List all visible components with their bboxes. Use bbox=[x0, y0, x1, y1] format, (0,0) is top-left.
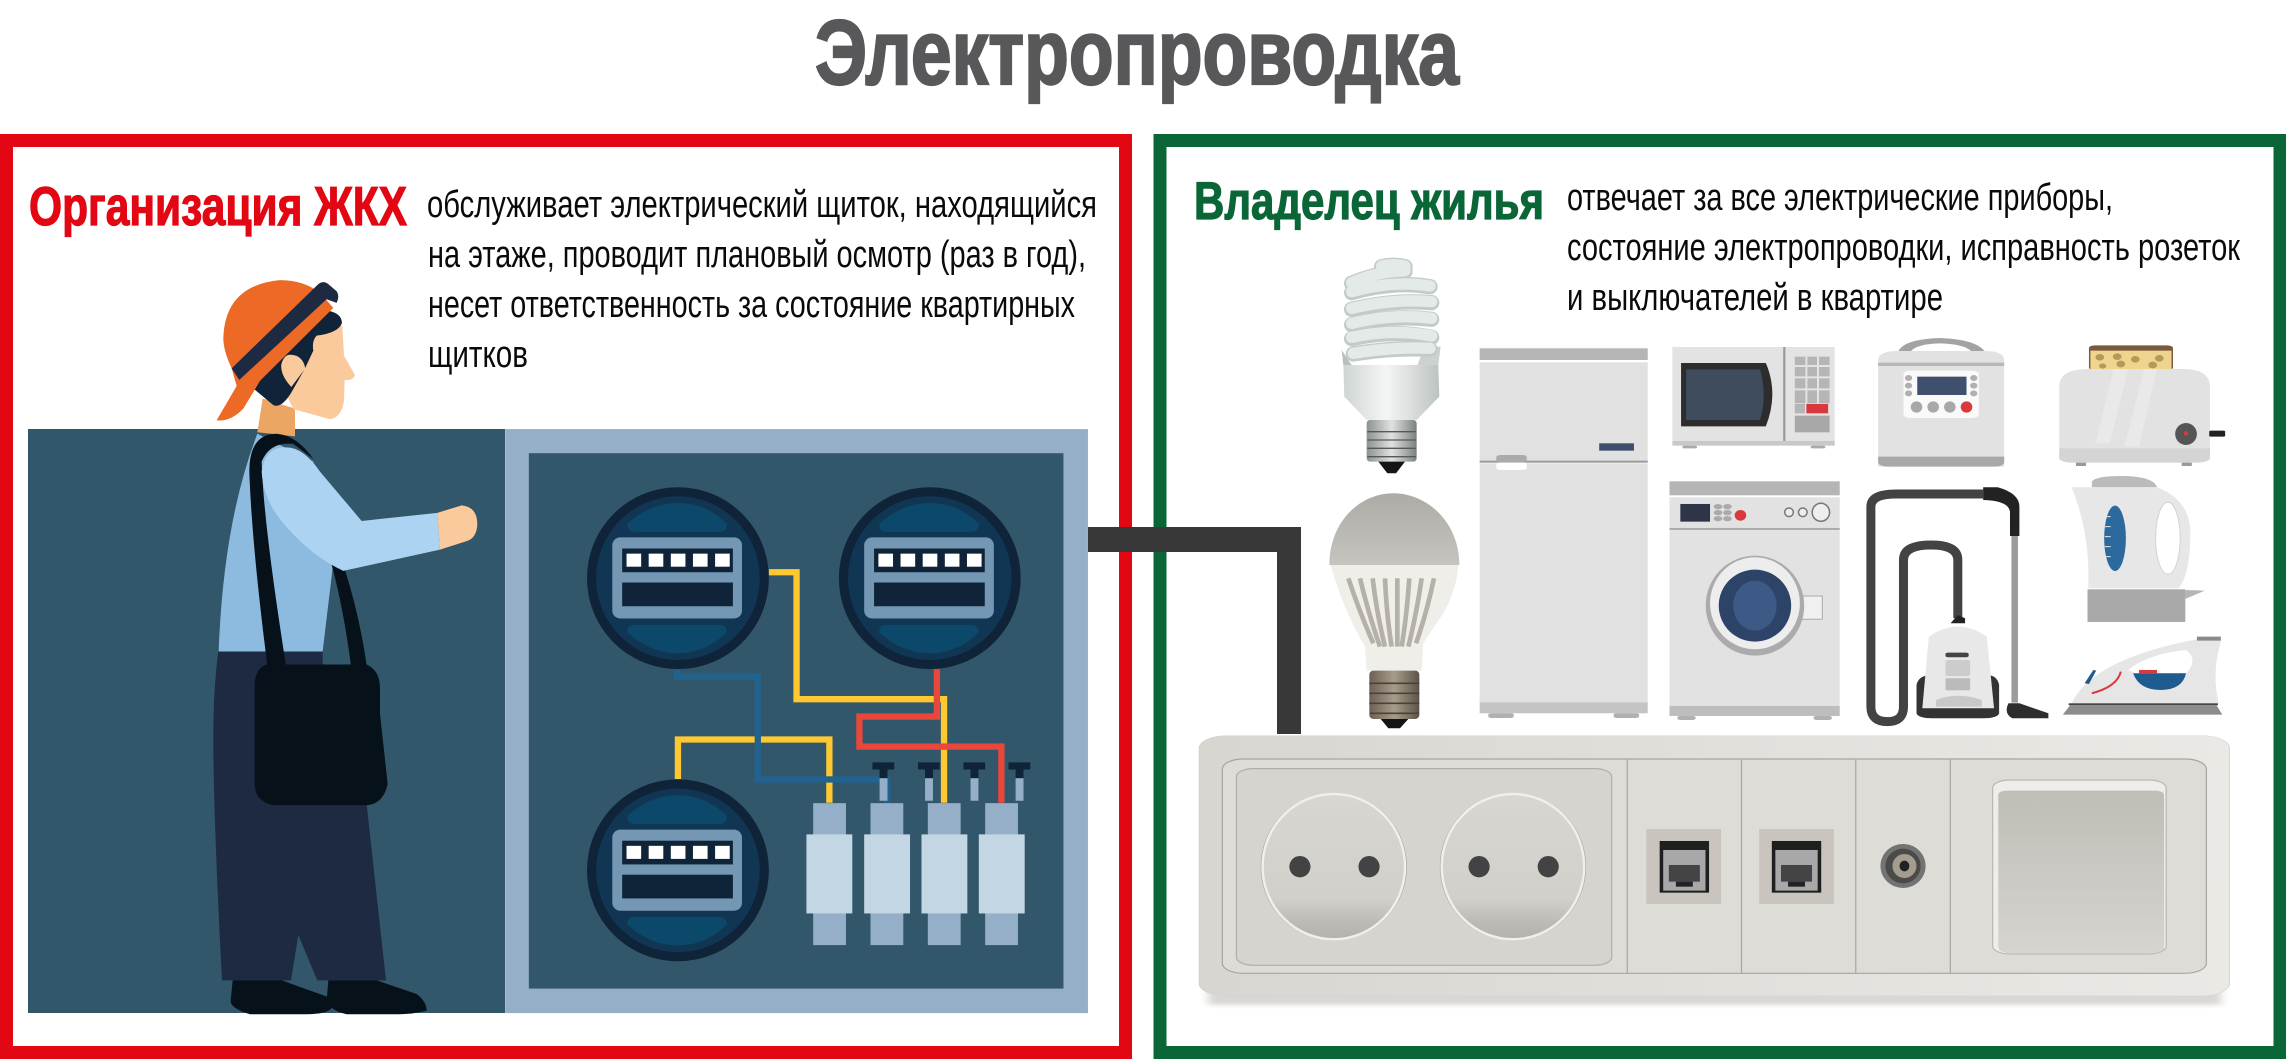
rocker switch bbox=[1993, 780, 2166, 954]
text block: owner duties bbox=[1567, 177, 2240, 319]
panel: home owner frame bbox=[1160, 140, 2280, 1052]
title: Электропроводка bbox=[815, 2, 1460, 104]
text block: organisation duties: на этаже, проводит плановый осмотр (раз в год), bbox=[428, 234, 1086, 276]
power cable bbox=[1088, 527, 1301, 734]
heading: owner: Владелец жилья bbox=[1194, 172, 1544, 231]
text block: organisation duties: щитков bbox=[428, 334, 528, 376]
cap band bbox=[232, 282, 338, 380]
shirt bbox=[219, 434, 333, 651]
arm bbox=[262, 447, 440, 571]
text block: organisation duties: несет ответственность за состояние квартирных bbox=[428, 284, 1075, 326]
fuses bbox=[806, 803, 1025, 945]
meter 2 bbox=[839, 487, 1021, 669]
meter 1 bbox=[587, 487, 769, 669]
plate bbox=[1199, 736, 2230, 996]
icon: vacuum cleaner bbox=[1871, 487, 2048, 722]
electrical cabinet bbox=[505, 429, 1088, 1013]
heading: organisation: Организация ЖКХ bbox=[29, 175, 407, 237]
appliances bbox=[1480, 338, 2225, 722]
hair bbox=[253, 310, 342, 406]
trousers bbox=[213, 651, 386, 980]
icon: washing machine bbox=[1669, 481, 1840, 720]
meter 3 bbox=[587, 779, 769, 961]
cap bbox=[217, 280, 333, 420]
panel: wall socket block bbox=[1199, 736, 2230, 1005]
wires bbox=[677, 572, 1001, 803]
icon: iron bbox=[2063, 637, 2222, 715]
shoes bbox=[231, 980, 427, 1014]
panel: housing organisation frame bbox=[6, 140, 1126, 1052]
face bbox=[280, 325, 355, 419]
CFL bulb bbox=[1342, 265, 1441, 473]
ear bbox=[281, 355, 305, 387]
hand bbox=[437, 505, 477, 550]
wall background panel bbox=[28, 429, 505, 1013]
network jacks bbox=[1646, 829, 1834, 904]
text block: organisation duties bbox=[427, 184, 1097, 376]
terminals bbox=[872, 762, 1030, 801]
text block: owner duties: отвечает за все электрические приборы, bbox=[1567, 177, 2113, 219]
text block: organisation duties: обслуживает электрический щиток, находящийся bbox=[427, 184, 1097, 226]
bag bbox=[255, 665, 388, 805]
dividers bbox=[1627, 760, 1950, 973]
socket section bbox=[1236, 769, 1612, 965]
LED bulb bbox=[1329, 493, 1459, 728]
icon: multicooker bbox=[1878, 338, 2004, 467]
neck bbox=[257, 399, 295, 436]
text block: owner duties: и выключателей в квартире bbox=[1567, 277, 1943, 319]
worker figure bbox=[213, 280, 477, 1014]
inner frame bbox=[1222, 759, 2206, 973]
icon: fridge bbox=[1480, 348, 1648, 718]
icon: toaster bbox=[2059, 345, 2225, 466]
plate shadow bbox=[1208, 990, 2221, 1005]
icon: microwave bbox=[1672, 347, 1835, 448]
bag straps bbox=[249, 434, 367, 666]
icon: kettle bbox=[2072, 476, 2205, 622]
sockets bbox=[1261, 793, 1586, 940]
icon: CFL and LED bulbs bbox=[1329, 265, 1459, 728]
coax jack bbox=[1880, 844, 1926, 888]
